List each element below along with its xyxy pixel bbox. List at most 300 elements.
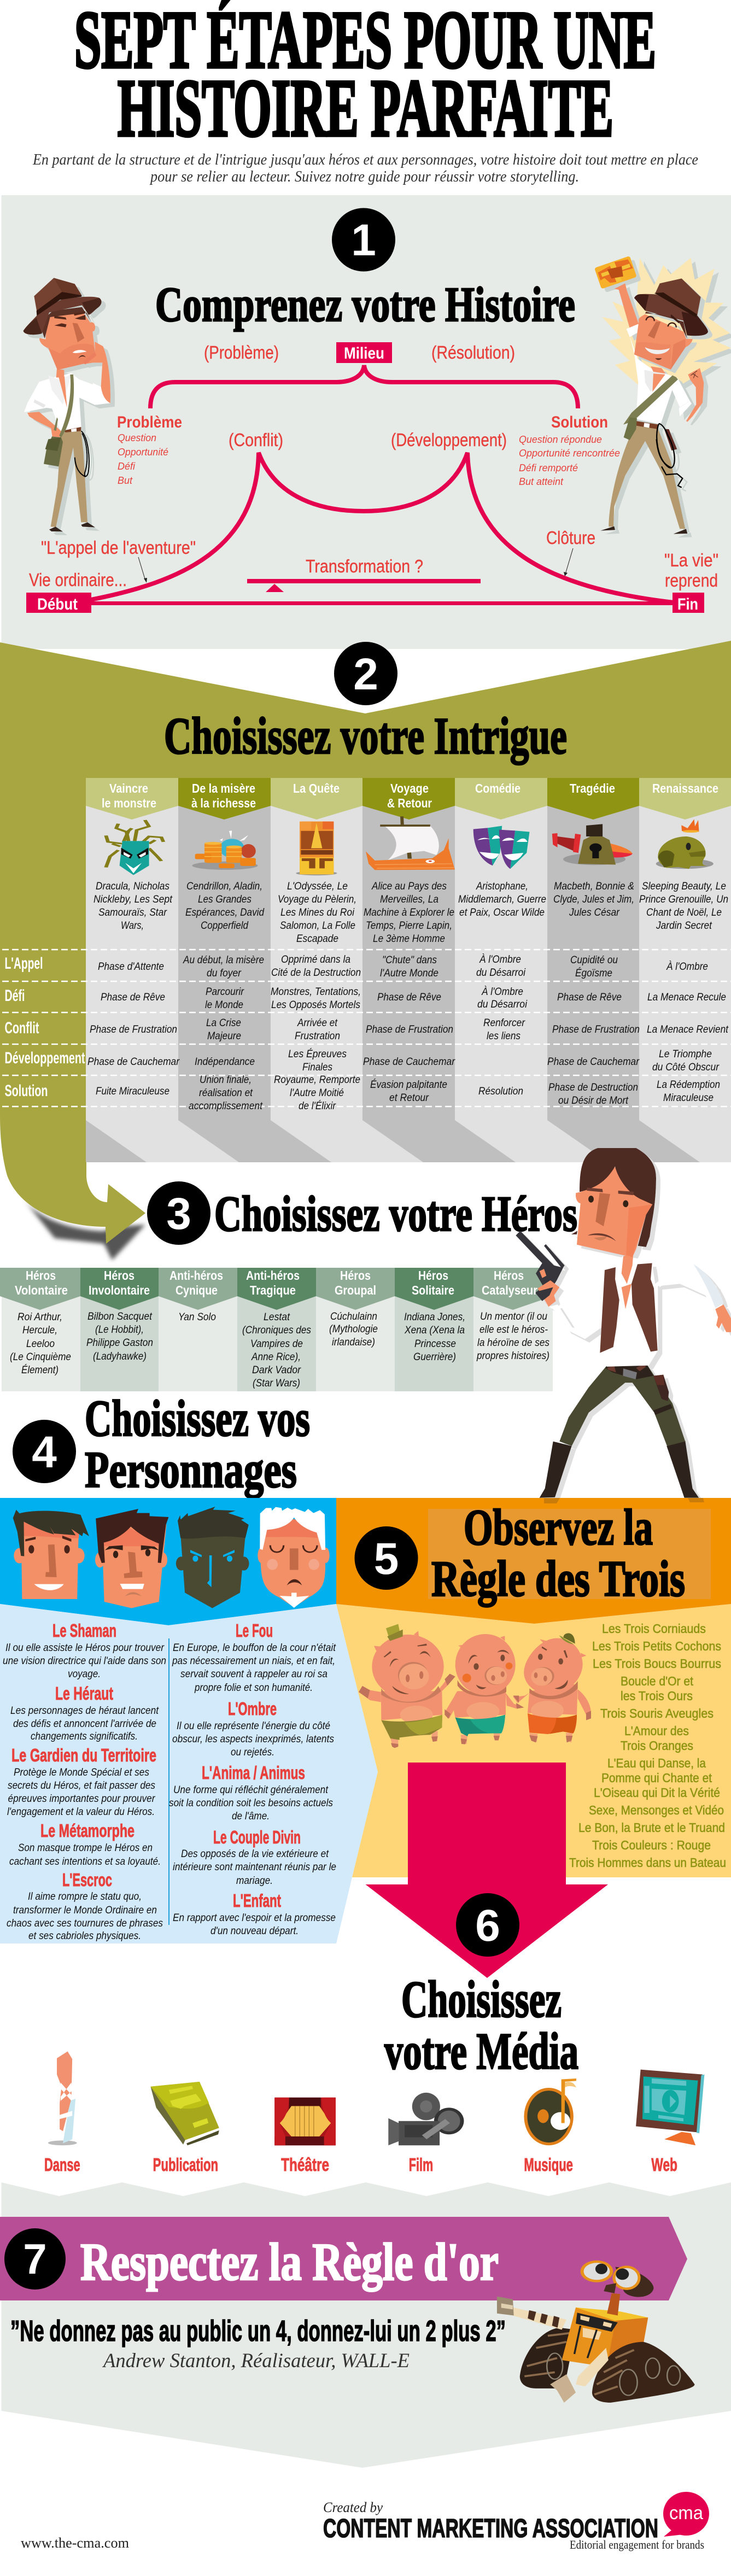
- character: space hero with blaster: [516, 1148, 731, 1498]
- row: solution: [96, 1074, 720, 1112]
- hero examples: Élement): [21, 1363, 59, 1376]
- hero examples: Leeloo: [26, 1338, 55, 1350]
- row: conflit: les liens: [487, 1030, 521, 1042]
- row: l'appel: Cupidité ou: [570, 954, 618, 966]
- arrow: cloture: [564, 548, 573, 576]
- icon: frog prince: [656, 819, 714, 869]
- hero examples: (Le Cinquième: [10, 1351, 71, 1363]
- hero headers: Involontaire: [89, 1283, 150, 1297]
- row: l'appel: du foyer: [207, 967, 242, 979]
- trilogy list: Les Trois Corniauds: [602, 1621, 706, 1636]
- fin label: Fin: [677, 595, 698, 613]
- archetypes column right: ou rejetés.: [231, 1746, 274, 1758]
- badge 6: 6: [475, 1901, 500, 1951]
- hero headers: Groupal: [335, 1283, 376, 1297]
- archetypes column left: chaos avec ses tournures de phrases: [7, 1917, 163, 1929]
- row: solution: l'Autre Moitié: [290, 1087, 344, 1099]
- three pigs illustration: [359, 1624, 591, 1748]
- banner: step 7: [0, 2217, 687, 2300]
- footer credit: Created by: [323, 2499, 383, 2515]
- hero examples: (Chroniques des: [242, 1324, 311, 1336]
- column headers: Comédie: [475, 781, 521, 795]
- icon: theatre masks: [473, 826, 530, 869]
- row: conflit: Majeure: [207, 1030, 241, 1042]
- logo: cma bubble: cma: [669, 2503, 703, 2524]
- solution list: Solution: [551, 413, 608, 431]
- media labels: Danse: [44, 2154, 80, 2175]
- hero examples: Bilbon Sacquet: [87, 1310, 153, 1322]
- appel de l'aventure label: "L'appel de l'aventure": [41, 537, 196, 558]
- baseline: [91, 601, 674, 605]
- row labels: Développement: [4, 1049, 85, 1067]
- row: solution: Phase de Destruction: [548, 1081, 638, 1093]
- icon: medusa mask: [106, 820, 163, 875]
- archetypes column left: Son masque trompe le Héros en: [18, 1842, 153, 1854]
- row: conflit: Arrivée et: [297, 1017, 338, 1029]
- trilogy list: Trois Couleurs : Rouge: [592, 1838, 711, 1852]
- plot example titles: et Paix, Oscar Wilde: [459, 906, 545, 918]
- website url: www.the-cma.com: [21, 2535, 129, 2551]
- row: developpement: du Côté Obscur: [652, 1061, 720, 1073]
- heading step 4: Personnages: [85, 1442, 297, 1498]
- developpement label: (Développement): [391, 430, 507, 450]
- solution list: [519, 413, 620, 487]
- archetypes column left: épreuves importantes pour prouver: [8, 1793, 156, 1805]
- row: solution: Fuite Miraculeuse: [96, 1085, 169, 1097]
- badge 3: 3: [166, 1189, 191, 1239]
- hero examples: (Star Wars): [253, 1377, 300, 1389]
- yellow body: [336, 1604, 731, 1877]
- plot example titles: Cendrillon, Aladin,: [186, 880, 262, 892]
- plot example titles: Jules César: [569, 906, 620, 918]
- icon: dance shoe: [48, 2051, 77, 2145]
- panel: step 5 rule of three: [336, 1498, 731, 1877]
- plot example titles: L'Odyssée, Le: [287, 880, 348, 892]
- hero examples: Un mentor (il ou: [480, 1310, 547, 1322]
- row: l'appel: Cité de la Destruction: [271, 967, 361, 979]
- badge 4: 4: [32, 1427, 57, 1477]
- row: defi: du Désarroi: [477, 998, 528, 1010]
- panel: plot table: [2, 778, 731, 1162]
- intro text: pour se relier au lecteur. Suivez notre guide pour réussir votre storytelling.: [149, 168, 579, 185]
- column headers: Tragédie: [570, 781, 615, 795]
- plot example titles: Wars,: [121, 920, 144, 932]
- row: developpement: [87, 1047, 720, 1073]
- archetypes column left: Les personnages de héraut lancent: [10, 1705, 159, 1717]
- plot example titles: Temps, Pierre Lapin,: [366, 920, 452, 932]
- plot example titles: Samouraïs, Star: [98, 906, 167, 918]
- archetypes column left: Le Héraut: [55, 1683, 113, 1703]
- archetypes column left: Le Métamorphe: [40, 1820, 134, 1841]
- probleme list: But: [118, 475, 133, 486]
- column headers: La Quête: [293, 781, 340, 795]
- badge 6: [456, 1893, 519, 1957]
- row: l'appel: du Désarroi: [476, 967, 526, 979]
- archetypes column left: [3, 1620, 166, 1942]
- trilogy list: Boucle d'Or et: [621, 1674, 694, 1688]
- archetypes column right: Le Couple Divin: [213, 1827, 301, 1847]
- hero headers: [0, 1268, 553, 1310]
- face: elder character: [258, 1507, 330, 1608]
- archetypes column right: L'Anima / Animus: [202, 1763, 305, 1783]
- hero examples: Cúchulainn: [330, 1310, 377, 1322]
- vie ordinaire label: Vie ordinaire...: [29, 570, 127, 590]
- face: smiling character: [13, 1510, 89, 1599]
- row: solution: et Retour: [389, 1092, 429, 1104]
- la vie reprend label: [664, 550, 718, 590]
- conflit label: (Conflit): [229, 430, 283, 450]
- row: l'appel: "Chute" dans: [382, 954, 437, 966]
- heading step 5: [431, 1500, 685, 1607]
- row: developpement: Finales: [302, 1061, 332, 1073]
- icon: ship: [366, 816, 455, 870]
- debut label: [26, 593, 91, 613]
- archetypes column left: des défis et annoncent l'arrivée de: [13, 1718, 156, 1730]
- archetypes column left: Il ou elle assiste le Héros pour trouver: [5, 1642, 165, 1654]
- plot example titles: Salomon, La Folle: [280, 920, 355, 932]
- plot example titles: Merveilles, La: [380, 893, 438, 905]
- row labels: L'Appel: [4, 955, 43, 973]
- la vie reprend label: "La vie": [664, 550, 718, 570]
- heading highlight: [428, 1509, 711, 1599]
- archetypes column right: de l'âme.: [232, 1810, 270, 1822]
- row labels: [4, 955, 85, 1100]
- archetypes column right: Il ou elle représente l'énergie du côté: [177, 1720, 330, 1732]
- panel: step 2 olive background and arrow to step 3: [0, 641, 731, 1260]
- hero headers: Tragique: [250, 1283, 296, 1297]
- badge 7: 7: [23, 2235, 47, 2283]
- media labels: Théâtre: [281, 2154, 329, 2175]
- trilogy list: les Trois Ours: [621, 1689, 693, 1703]
- archetypes column left: Le Gardien du Territoire: [11, 1745, 156, 1765]
- solution list: Question répondue: [519, 434, 602, 445]
- trilogy list: L'Amour des: [624, 1724, 689, 1738]
- archetypes column left: cachant ses intentions et sa loyauté.: [9, 1855, 161, 1867]
- row: solution: de l'Élixir: [299, 1099, 336, 1112]
- row: solution: Royaume, Remporte: [274, 1074, 360, 1086]
- media icons: [44, 2051, 704, 2175]
- plot example titles: Aristophane,: [476, 880, 528, 892]
- row: l'appel: Opprimé dans la: [281, 953, 350, 965]
- archetypes column right: L'Ombre: [228, 1699, 277, 1719]
- plot example titles: Dracula, Nicholas: [96, 880, 169, 892]
- plot example titles: Macbeth, Bonnie &: [554, 880, 634, 892]
- media labels: Publication: [153, 2154, 218, 2175]
- column headers: le monstre: [102, 796, 156, 810]
- footer credit: [323, 2499, 704, 2551]
- row: l'appel: Phase d'Attente: [98, 961, 164, 973]
- badge 7: [4, 2228, 66, 2290]
- balance icon: [247, 579, 481, 592]
- row: defi: Monstres, Tentations,: [271, 986, 361, 998]
- panel: step 4 characters: [0, 1498, 378, 1943]
- row: defi: À l'Ombre: [481, 985, 523, 998]
- archetypes column left: une vision directrice qui l'aide dans son: [3, 1655, 166, 1667]
- column headers: [86, 778, 731, 819]
- row: solution: réalisation et: [199, 1087, 253, 1099]
- resolution heading label: (Résolution): [431, 342, 515, 362]
- badge 3: [147, 1181, 210, 1245]
- archetypes column left: secrets du Héros, et fait passer des: [8, 1779, 155, 1792]
- archetypes column right: d'un nouveau départ.: [210, 1925, 299, 1937]
- heading step 4: Choisissez vos: [85, 1390, 310, 1447]
- row: l'appel: Au début, la misère: [183, 954, 264, 966]
- row: developpement: Les Épreuves: [288, 1047, 347, 1060]
- archetypes column left: l'engagement et la valeur du Héros.: [7, 1806, 155, 1818]
- badge 1: [332, 208, 395, 271]
- debut label: Début: [37, 595, 78, 613]
- column headers: & Retour: [387, 796, 432, 810]
- hero headers: Catalyseur: [482, 1283, 537, 1297]
- hero headers: Héros: [418, 1268, 448, 1283]
- transformation label: Transformation ?: [306, 556, 423, 576]
- divider: [168, 1638, 169, 1925]
- plot example titles: Nickleby, Les Sept: [93, 893, 173, 905]
- archetypes column left: Il aime rompre le statu quo,: [28, 1890, 142, 1902]
- probleme heading label: (Problème): [204, 342, 279, 362]
- archetypes column right: soit la condition soit les besoins actuels: [169, 1797, 333, 1809]
- plot example titles: Clyde, Jules et Jim,: [553, 893, 634, 905]
- logo: cma bubble: [663, 2492, 709, 2537]
- row: solution: La Rédemption: [657, 1079, 720, 1091]
- archetypes column right: servait souvent à rappeler au roi sa: [180, 1668, 328, 1680]
- archetypes column right: intérieure sont maintenant réunis par le: [173, 1861, 336, 1873]
- row: defi: le Monde: [205, 999, 243, 1011]
- hero examples: Dark Vador: [252, 1364, 301, 1376]
- intro text: [32, 151, 698, 185]
- heading step 2: Choisissez votre Intrigue: [164, 707, 567, 765]
- icon: totem: [296, 822, 337, 875]
- column headers: Renaissance: [652, 781, 718, 795]
- row: conflit: Phase de Frustration: [552, 1023, 640, 1035]
- archetypes column left: Protège le Monde Spécial et ses: [14, 1766, 149, 1778]
- media labels: Web: [651, 2154, 677, 2175]
- media labels: [44, 2154, 677, 2175]
- badge 5: 5: [374, 1534, 399, 1584]
- icon: web monitor: [636, 2070, 704, 2145]
- plot example titles: Chant de Noël, Le: [646, 906, 722, 918]
- row: l'appel: [98, 953, 708, 979]
- hero headers: Anti-héros: [169, 1268, 223, 1283]
- hero headers: Héros: [340, 1268, 371, 1283]
- heading step 6: [384, 1970, 578, 2080]
- row labels: Conflit: [4, 1019, 39, 1037]
- row: conflit: Phase de Frustration: [366, 1023, 453, 1035]
- row: conflit: La Crise: [206, 1017, 241, 1029]
- badge 5: [354, 1526, 418, 1590]
- hero headers: Héros: [494, 1268, 524, 1283]
- pig with green hat: [359, 1624, 455, 1748]
- solution list: But atteint: [519, 476, 564, 487]
- plot example titles: Le 3ème Homme: [373, 933, 445, 945]
- probleme list: [117, 413, 182, 486]
- plot example titles: [93, 880, 728, 945]
- plot icons: [106, 816, 714, 875]
- row: developpement: Phase de Cauchemar: [87, 1056, 180, 1068]
- row: defi: Phase de Rêve: [101, 991, 165, 1003]
- badge 2: [334, 642, 397, 705]
- media labels: Film: [409, 2154, 433, 2175]
- pig with orange shorts: [513, 1633, 591, 1742]
- icon: dagger and poison: [552, 824, 633, 865]
- trilogy list: [569, 1621, 726, 1870]
- row: conflit: Frustration: [295, 1030, 340, 1042]
- badge 2: 2: [353, 649, 378, 699]
- archetypes column right: [169, 1620, 336, 1937]
- icon: music disc: [524, 2079, 576, 2145]
- archetypes column right: Le Fou: [236, 1620, 273, 1641]
- pig with teal shorts: [445, 1634, 524, 1744]
- heading step 3: Choisissez votre Héros: [214, 1186, 577, 1242]
- trilogy list: Les Trois Petits Cochons: [592, 1639, 721, 1653]
- probleme list: Défi: [118, 460, 136, 472]
- trilogy list: Trois Oranges: [621, 1738, 693, 1753]
- heading step 6: Choisissez: [401, 1970, 562, 2028]
- hero darker columns: [80, 1268, 473, 1391]
- solution list: Opportunité rencontrée: [519, 447, 620, 459]
- icon: theatre stage: [274, 2098, 336, 2145]
- hero table backgrounds: [2, 1268, 553, 1391]
- quote: Andrew Stanton, Réalisateur, WALL-E: [102, 2350, 410, 2372]
- hero examples: Guerrière): [413, 1351, 456, 1363]
- hero headers: Volontaire: [15, 1283, 68, 1297]
- cloture label: Clôture: [546, 528, 595, 548]
- archetypes column right: En rapport avec l'espoir et la promesse: [173, 1912, 336, 1924]
- row: developpement: Indépendance: [195, 1056, 255, 1068]
- trilogy list: Trois Souris Aveugles: [600, 1706, 714, 1720]
- plot example titles: Les Mines du Roi: [280, 906, 355, 918]
- face: serious character: [95, 1509, 168, 1608]
- icon: film camera: [388, 2093, 464, 2145]
- archetype faces: [13, 1507, 330, 1608]
- brace curve: [150, 365, 578, 408]
- badge 4: [13, 1420, 76, 1483]
- archetypes column right: L'Enfant: [233, 1890, 281, 1911]
- hero examples: Roi Arthur,: [17, 1311, 62, 1323]
- character: treasure burst: [603, 258, 731, 384]
- row: defi: Phase de Rêve: [557, 991, 622, 1003]
- table column backgrounds: [86, 778, 731, 1162]
- icon: book: [150, 2082, 219, 2145]
- story diagram: [26, 342, 718, 613]
- archetypes column left: L'Escroc: [62, 1870, 112, 1890]
- intro text: En partant de la structure et de l'intrigue jusqu'aux héros et aux personnages, votre histoire doit tout mettre en place: [32, 151, 698, 168]
- probleme list: Opportunité: [118, 446, 168, 458]
- probleme list: Problème: [117, 413, 182, 431]
- hero examples: Lestat: [264, 1311, 290, 1323]
- hero examples: Philippe Gaston: [86, 1337, 153, 1349]
- archetypes column right: pas nécessairement un niais, et en fait,: [172, 1655, 335, 1667]
- panel: step 7 background: [1, 2182, 731, 2468]
- archetypes column left: voyage.: [68, 1668, 101, 1680]
- row: solution: Union finale,: [200, 1074, 252, 1086]
- la vie reprend label: reprend: [665, 570, 718, 590]
- archetypes column right: Des opposés de la vie extérieure et: [181, 1848, 329, 1860]
- quote: [10, 2315, 506, 2372]
- row: solution: Résolution: [478, 1085, 523, 1097]
- hero examples: elle est le héros-: [479, 1324, 548, 1336]
- arrow: to step 6: [365, 1763, 608, 1978]
- column headers: Voyage: [390, 781, 429, 795]
- row: conflit: [90, 1017, 729, 1042]
- row: solution: ou Désir de Mort: [558, 1094, 629, 1106]
- plot example titles: Alice au Pays des: [371, 880, 447, 892]
- icon: treasure: [192, 830, 258, 870]
- panel: step 1 background: [1, 195, 731, 649]
- trilogy list: Pomme qui Chante et: [601, 1771, 712, 1785]
- hero examples: (Mythologie: [329, 1323, 378, 1335]
- hero headers: Solitaire: [412, 1283, 454, 1297]
- heading step 1: Comprenez votre Histoire: [155, 278, 575, 332]
- row: solution: Miraculeuse: [663, 1092, 714, 1104]
- hero examples: Hercule,: [22, 1324, 57, 1336]
- hero headers: Héros: [26, 1268, 56, 1283]
- title: [74, 0, 656, 154]
- plot example titles: Escapade: [296, 933, 338, 945]
- row: defi: [101, 985, 726, 1011]
- archetypes column left: transformer le Monde Ordinaire en: [13, 1904, 157, 1916]
- hero examples: Indiana Jones,: [404, 1311, 465, 1323]
- plot example titles: Espérances, David: [185, 906, 265, 918]
- column headers: De la misère: [192, 781, 255, 795]
- row: l'appel: l'Autre Monde: [380, 967, 438, 979]
- hero examples: Vampires de: [250, 1338, 303, 1350]
- illustration: robot: [497, 2261, 695, 2403]
- hero headers: Héros: [104, 1268, 134, 1283]
- row: l'appel: Égoïsme: [575, 967, 612, 979]
- archetypes column left: changements significatifs.: [31, 1730, 138, 1742]
- hero examples: propres histoires): [476, 1350, 549, 1362]
- hero examples: Princesse: [414, 1338, 456, 1350]
- probleme list: Question: [118, 432, 156, 443]
- archetypes column right: obscur, les aspects inexprimés, latents: [172, 1733, 334, 1745]
- plot example titles: Les Grandes: [198, 893, 252, 905]
- boot shadows on orange: [544, 1498, 704, 1503]
- trilogy list: Les Trois Boucs Bourrus: [593, 1656, 721, 1671]
- heading step 4: [85, 1390, 310, 1498]
- footer credit: Editorial engagement for brands: [570, 2538, 704, 2551]
- archetypes column right: En Europe, le bouffon de la cour n'était: [173, 1642, 336, 1654]
- row: solution: Évasion palpitante: [370, 1078, 447, 1091]
- heading step 5: Observez la: [464, 1500, 653, 1556]
- row: defi: Les Opposés Mortels: [271, 999, 360, 1011]
- hero examples: Anne Rice),: [251, 1351, 301, 1363]
- hero examples: Xena (Xena la: [404, 1324, 465, 1336]
- plot example titles: Jardin Secret: [656, 920, 712, 932]
- archetypes column left: et ses cabrioles physiques.: [28, 1930, 141, 1942]
- panel: step 1 comprendre l'histoire: [24, 208, 731, 613]
- row: defi: Phase de Rêve: [377, 991, 441, 1003]
- plot example titles: Voyage du Pèlerin,: [278, 893, 356, 905]
- media labels: Musique: [524, 2154, 573, 2175]
- plot example titles: Copperfield: [201, 920, 249, 932]
- row labels: Solution: [4, 1082, 48, 1100]
- plot example titles: Middlemarch, Guerre: [458, 893, 546, 905]
- row: l'appel: À l'Ombre: [479, 953, 521, 965]
- hero examples: (Le Hobbit),: [95, 1324, 144, 1336]
- row: developpement: Phase de Cauchemar: [547, 1056, 640, 1068]
- hero examples: [10, 1310, 549, 1389]
- column headers: à la richesse: [191, 796, 256, 810]
- hero examples: (Ladyhawke): [93, 1350, 147, 1362]
- hero examples: irlandaise): [332, 1336, 375, 1348]
- badge 1: 1: [351, 215, 376, 265]
- hero headers: Cynique: [176, 1283, 218, 1297]
- hero examples: la héroïne de ses: [477, 1337, 549, 1349]
- trilogy list: L'Eau qui Danse, la: [607, 1756, 706, 1770]
- row: defi: Parcourir: [206, 986, 244, 998]
- fin label: [672, 593, 704, 613]
